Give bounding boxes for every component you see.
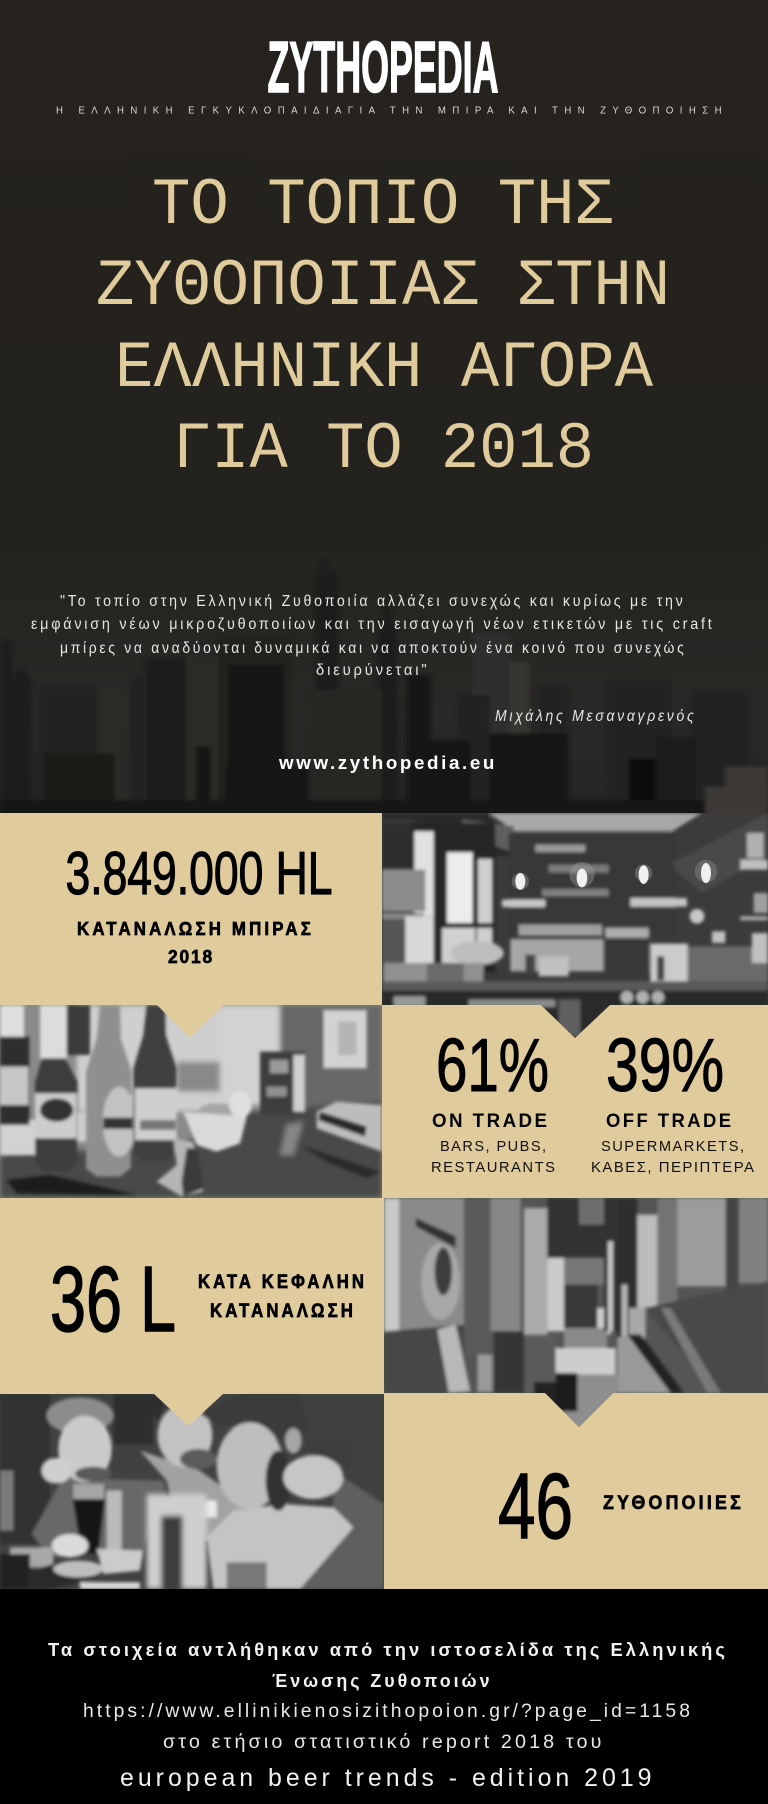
quote author: Μιχάλης Μεσαναγρενός xyxy=(495,708,696,725)
on trade venues: BARS, PUBS, xyxy=(440,1138,548,1155)
footer: source heading: Τα στοιχεία αντλήθηκαν από την ιστοσελίδα της Ελληνικής xyxy=(48,1640,728,1660)
label: off trade: OFF TRADE xyxy=(606,1111,734,1132)
quote: μπίρες να αναδύονται δυναμικά και να αποκτούν ένα κοινό που συνεχώς xyxy=(60,640,686,657)
footer xyxy=(0,1589,768,1804)
photo: brewery tanks xyxy=(384,1198,768,1428)
quote: "Το τοπίο στην Ελληνική Ζυθοποιία αλλάζει συνεχώς και κυρίως με την xyxy=(60,593,686,610)
header background with city skyline xyxy=(0,0,768,820)
stat: 36 L: 36 L xyxy=(50,1247,176,1351)
label: per capita consumption: ΚΑΤΑ ΚΕΦΑΛΗΝ xyxy=(198,1272,367,1293)
off trade venues: SUPERMARKETS, xyxy=(601,1138,746,1155)
label: per capita consumption xyxy=(198,1272,367,1322)
quote: διευρύνεται" xyxy=(316,662,430,679)
footer: source url: https://www.ellinikienosizithopoion.gr/?page_id=1158 xyxy=(83,1701,693,1722)
off trade venues xyxy=(591,1138,756,1176)
quote xyxy=(31,593,714,679)
on trade venues xyxy=(431,1138,556,1176)
main title: ΖΥΘΟΠΟΙΙΑΣ ΣΤΗΝ xyxy=(96,249,670,324)
label: per capita consumption: ΚΑΤΑΝΑΛΩΣΗ xyxy=(210,1301,356,1322)
main title: ΕΛΛΗΝΙΚΗ ΑΓΟΡΑ xyxy=(115,331,653,406)
text: ZYTHOPEDIA xyxy=(268,28,498,108)
stat: 3.849.000 HL: 3.849.000 HL xyxy=(66,840,332,907)
label: breweries: ΖΥΘΟΠΟΙΙΕΣ xyxy=(603,1493,744,1514)
tagline: Η ΕΛΛΗΝΙΚΗ ΕΓΚΥΚΛΟΠΑΙΔΙΑΓΙΑ ΤΗΝ ΜΠΙΡΑ ΚΑΙ ΤΗΝ ΖΥΘΟΠΟΙΗΣΗ xyxy=(56,104,728,116)
stat: 46: 46 xyxy=(498,1454,573,1558)
on trade venues: RESTAURANTS xyxy=(431,1159,556,1176)
panel: breweries xyxy=(384,1393,768,1589)
quote: εμφάνιση νέων μικροζυθοποιίων και την εισαγωγή νέων ετικετών με τις craft xyxy=(31,616,714,633)
photo: beer bottles xyxy=(0,1005,382,1198)
label: year: 2018 xyxy=(168,946,214,967)
footer: publication: european beer trends - edition 2019 xyxy=(120,1764,656,1792)
label: consumption: ΚΑΤΑΝΑΛΩΣΗ ΜΠΙΡΑΣ xyxy=(77,918,314,939)
website link: www.zythopedia.eu xyxy=(278,753,497,773)
panel: trade split xyxy=(382,1005,768,1198)
panel: beer consumption xyxy=(0,813,382,1038)
off trade venues: ΚΑΒΕΣ, ΠΕΡΙΠΤΕΡΑ xyxy=(591,1159,756,1176)
footer: report note: στο ετήσιο στατιστικό report 2018 του xyxy=(163,1732,604,1753)
stat: 61%: 61% xyxy=(436,1023,549,1107)
footer: source heading: Ένωσης Ζυθοποιών xyxy=(272,1671,492,1691)
photo: friends with beer xyxy=(0,1394,384,1589)
photo: bar interior xyxy=(382,813,768,1039)
panel: per capita xyxy=(0,1198,384,1426)
stat: 39%: 39% xyxy=(606,1023,724,1107)
main title: ΓΙΑ ΤΟ 2018 xyxy=(173,412,594,487)
main title: ΤΟ ΤΟΠΙΟ ΤΗΣ xyxy=(152,168,613,243)
label: on trade: ON TRADE xyxy=(432,1111,550,1132)
main title xyxy=(96,168,670,487)
footer: source heading xyxy=(48,1640,728,1691)
